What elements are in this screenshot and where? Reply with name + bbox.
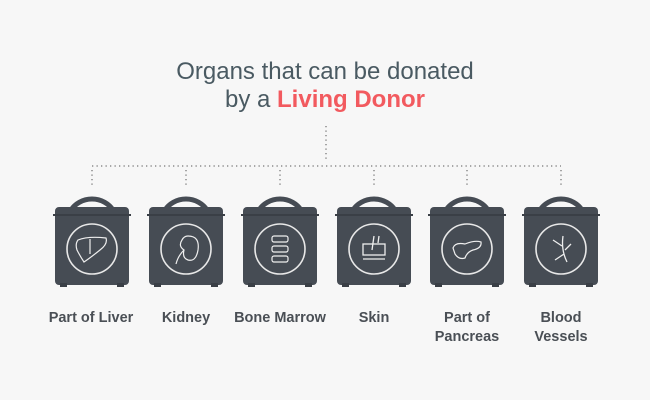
- labels: Blood: [540, 310, 582, 326]
- connector tree: [92, 126, 561, 186]
- icon: vessels: [553, 236, 571, 262]
- labels: Pancreas: [435, 329, 499, 345]
- labels: Skin: [359, 310, 389, 326]
- labels: Part of: [444, 310, 490, 326]
- box: liver: [53, 199, 131, 287]
- labels: Kidney: [162, 310, 210, 326]
- title: [176, 58, 474, 113]
- title: Organs that can be donated: [176, 58, 474, 85]
- box: kidney: [147, 199, 225, 287]
- labels: Vessels: [534, 329, 588, 345]
- labels: Part of Liver: [49, 310, 134, 326]
- labels: Bone Marrow: [234, 310, 327, 326]
- title: by a Living Donor: [225, 86, 425, 113]
- icon: kidney: [176, 236, 198, 264]
- box: pancreas: [428, 199, 506, 287]
- icon: liver: [76, 237, 106, 262]
- box: blood vessels: [522, 199, 600, 287]
- box: skin: [335, 199, 413, 287]
- icon: pancreas: [453, 241, 481, 258]
- icon: skin: [363, 236, 385, 259]
- labels: [49, 310, 588, 345]
- box: bone marrow: [241, 199, 319, 287]
- icon: spine: [272, 236, 288, 262]
